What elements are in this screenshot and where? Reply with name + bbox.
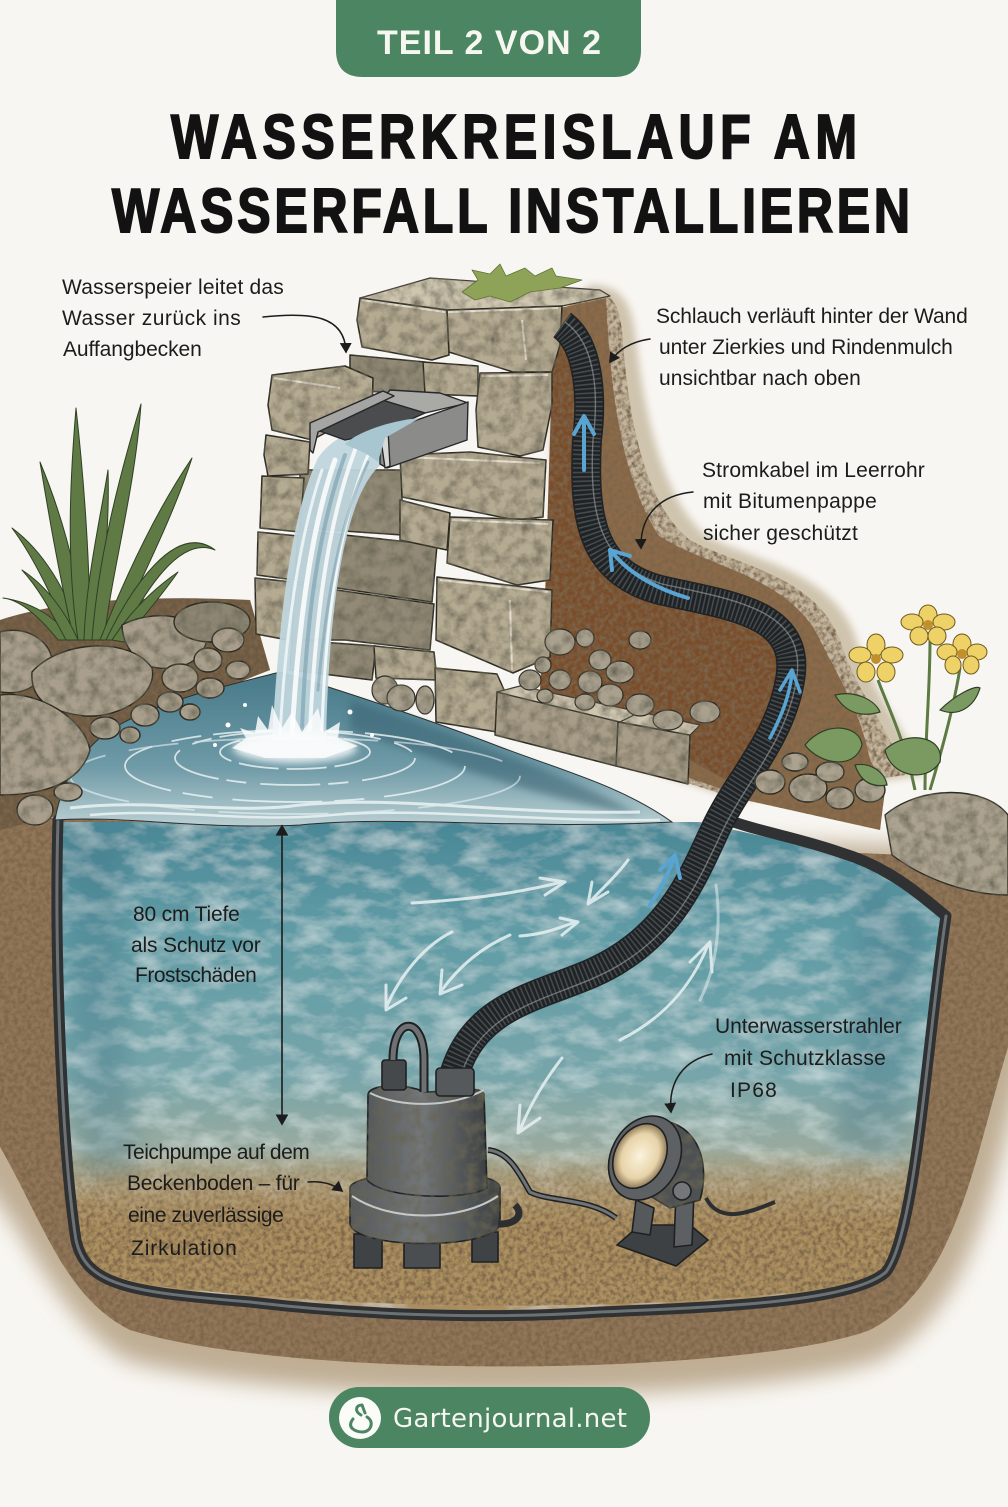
waterfall [272,420,395,740]
low wall blocks [495,686,700,784]
callout: power cable: Stromkabel im Leerrohr [702,459,925,482]
callout: spotlight: IP68 [730,1079,777,1102]
title: WASSERKREISLAUF AM [171,102,857,171]
right bank rock and pebbles [755,753,1008,895]
callout: water spout [62,276,346,361]
callout: spotlight: mit Schutzklasse [724,1047,886,1070]
pump [350,1026,616,1268]
title: WASSERFALL INSTALLIEREN [112,176,910,245]
callout: pump: eine zuverlässige [128,1204,284,1227]
pool water body [59,822,942,1312]
top moss [462,264,582,302]
footer badge [329,1387,650,1448]
callout: power cable: sicher geschützt [703,522,858,545]
callout: depth [131,903,261,987]
callout: pump: Zirkulation [131,1237,237,1260]
callout: water spout: Wasserspeier leitet das [62,276,284,299]
stones behind waterfall [290,355,437,680]
spout [310,390,468,468]
callout: spotlight: Unterwasserstrahler [715,1015,902,1038]
depth dimension arrow [281,826,283,1124]
pond liner [57,796,946,1316]
main stones [255,298,562,732]
header badge: TEIL 2 VON 2 [377,24,601,62]
underwater flow arrows [386,860,718,1133]
left plant [3,404,215,642]
callout: depth: als Schutz vor [131,934,261,957]
callout: hose behind wall [610,305,968,390]
flow arrows on hose [574,416,800,905]
wall top surface [360,278,610,310]
flowering marsh plant [805,605,987,790]
callout: power cable: mit Bitumenpappe [703,490,877,513]
header badge [336,0,641,77]
callout: depth: 80 cm Tiefe [133,903,240,926]
callout: pump: Teichpumpe auf dem [123,1141,310,1164]
soil cross-section [0,815,1008,1396]
hose [455,322,798,1072]
callout: power cable [641,459,925,548]
left bank rocks and pebbles [0,602,250,825]
underwater spotlight [594,1103,775,1266]
stone wall [255,278,700,784]
callout: hose behind wall: Schlauch verläuft hinter der Wand [656,305,968,328]
footer badge: Gartenjournal.net [393,1404,627,1434]
title [112,102,910,245]
stone top highlights [274,300,558,670]
water surface [55,672,672,826]
icon: plant logo [339,1397,381,1439]
callout: pump [123,1141,342,1260]
callout: pump: Beckenboden – für [127,1172,300,1195]
splash [213,703,374,763]
callout: hose behind wall: unter Zierkies und Rindenmulch [659,336,953,359]
callout: hose behind wall: unsichtbar nach oben [659,367,861,390]
left bank earth [0,598,270,830]
callout: water spout: Auffangbecken [63,338,202,361]
callout: water spout: Wasser zurück ins [62,307,241,330]
pebbles beside the wall [372,629,720,730]
callout: spotlight [671,1015,902,1112]
callout: depth: Frostschäden [135,964,257,987]
soil bank and mulch behind the wall [540,285,925,830]
